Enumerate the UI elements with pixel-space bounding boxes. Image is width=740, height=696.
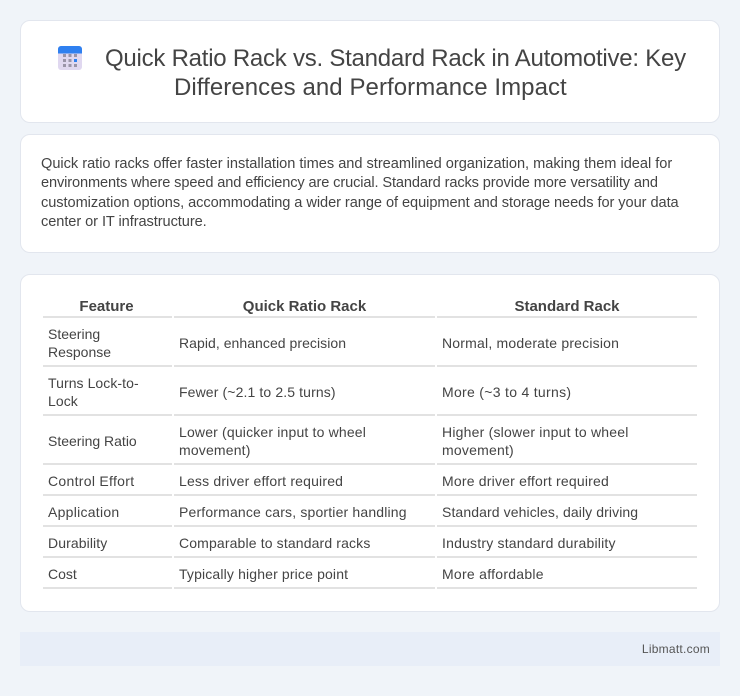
row: Application: Performance cars, sportier handling: [179, 504, 407, 520]
row: Cost: More affordable: [442, 566, 544, 582]
row: Application: Standard vehicles, daily driving: [442, 504, 638, 520]
row: Steering Response: Rapid, enhanced precision: [179, 335, 346, 351]
intro paragraph: Quick ratio racks offer faster installation times and streamlined organization, making them ideal for: [41, 156, 672, 172]
comparison table panel: [20, 274, 720, 612]
row: Steering Ratio: Higher (slower input to wheel: [442, 424, 629, 440]
table header: Quick Ratio Rack: Quick Ratio Rack: [243, 298, 366, 315]
intro paragraph: center or IT infrastructure.: [41, 214, 207, 230]
row: Steering Response: Response: [48, 344, 111, 360]
row: Steering Ratio: Lower (quicker input to wheel: [179, 424, 366, 440]
table header: Standard Rack: Standard Rack: [514, 298, 620, 315]
intro paragraph: environments where speed and efficiency are crucial. Standard racks provide more versatility and: [41, 175, 658, 191]
row: Durability: Durability: [48, 535, 107, 551]
row: Steering Response: Normal, moderate precision: [442, 335, 619, 351]
title: Quick Ratio Rack vs. Standard Rack in Automotive: Key: [105, 45, 686, 72]
row: Control Effort: Control Effort: [48, 473, 134, 489]
row: Durability: Industry standard durability: [442, 535, 616, 551]
row: Cost: Cost: [48, 566, 77, 582]
row: Turns Lock-to-Lock: More (~3 to 4 turns): [442, 384, 571, 400]
row: Steering Ratio: movement): [442, 442, 514, 458]
table header: Feature: Feature: [79, 298, 134, 315]
row: Steering Response: Steering: [48, 326, 100, 342]
row: Turns Lock-to-Lock: [48, 375, 571, 409]
row: Control Effort: More driver effort required: [442, 473, 609, 489]
header panel: [20, 20, 720, 123]
row: Turns Lock-to-Lock: Lock: [48, 393, 78, 409]
footer credit: Libmatt.com: [642, 642, 710, 656]
intro paragraph: customization options, accommodating a wider range of equipment and storage needs for your data: [41, 194, 679, 210]
intro paragraph: [41, 156, 679, 230]
row: Turns Lock-to-Lock: Turns Lock-to-: [48, 375, 139, 391]
intro text panel: [20, 134, 720, 253]
title: [105, 45, 686, 100]
row: Durability: Comparable to standard racks: [179, 535, 370, 551]
row: Control Effort: [48, 473, 609, 489]
row: Steering Response: [48, 326, 619, 360]
row: Application: [48, 504, 638, 520]
row: Application: Application: [48, 504, 119, 520]
row: Steering Ratio: [48, 424, 629, 458]
row: Steering Ratio: Steering Ratio: [48, 433, 137, 449]
icon: calendar: [58, 46, 82, 70]
row: Cost: Typically higher price point: [179, 566, 348, 582]
footer bar: [20, 632, 720, 666]
title: Differences and Performance Impact: [174, 74, 567, 100]
row: Steering Ratio: movement): [179, 442, 251, 458]
row: Control Effort: Less driver effort required: [179, 473, 343, 489]
row: Turns Lock-to-Lock: Fewer (~2.1 to 2.5 turns): [179, 384, 336, 400]
row: Cost: [48, 566, 544, 582]
row: Durability: [48, 535, 616, 551]
